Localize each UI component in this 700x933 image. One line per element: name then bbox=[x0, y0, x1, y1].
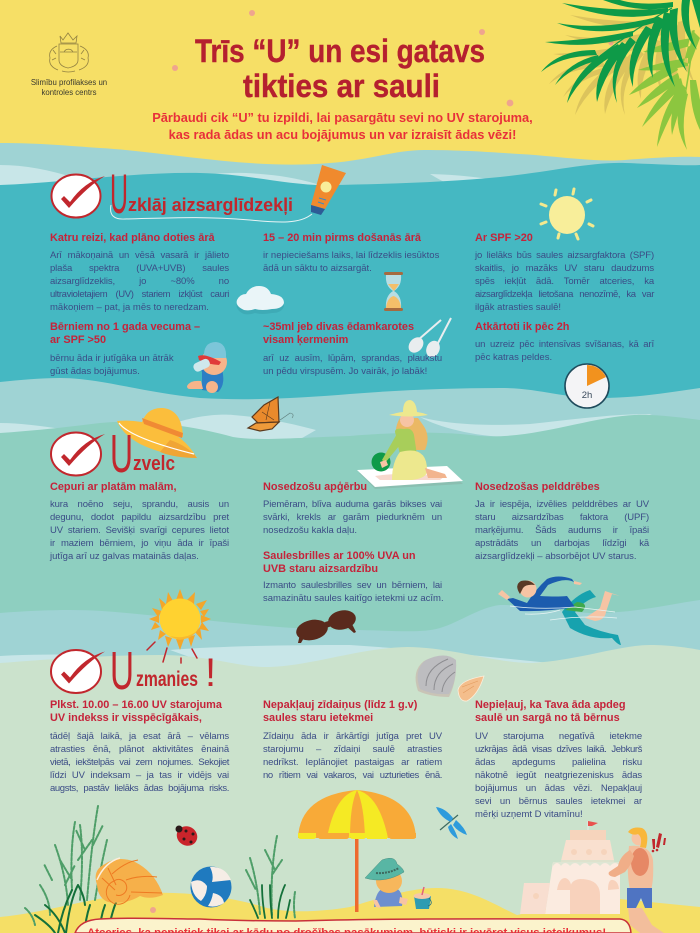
panel: clothing bbox=[263, 481, 442, 536]
background: pale green section bbox=[0, 645, 700, 933]
panel: hat: jutīga arī uz galvas matainās daļas. bbox=[50, 551, 199, 562]
panel: children SPF bbox=[50, 321, 200, 377]
panel: Uzklāj col 1: ultravioletajiem (UV) stariem izkļūst cauri bbox=[50, 289, 229, 300]
panel: 35 ml: ~35ml jeb divas ēdamkarotes bbox=[263, 321, 414, 333]
panel: children SPF: Bērniem no 1 gada vecuma – bbox=[50, 321, 200, 333]
panel: UV index: līdzi UV indeksam – ja tas ir vidējs vai bbox=[50, 770, 229, 781]
heading: Uzmanies: ! bbox=[205, 651, 216, 695]
heading: Uzmanies bbox=[110, 641, 216, 701]
panel: repeat 2h bbox=[475, 321, 654, 363]
panel: 35 ml: visam ķermenim bbox=[263, 334, 348, 346]
panel: sunglasses bbox=[263, 550, 444, 604]
panel: swimwear: marķējumu. Šāds audums ir īpaši bbox=[475, 525, 649, 536]
icon: palm dark frond bbox=[541, 0, 700, 103]
background: pale foam middle bbox=[0, 414, 652, 445]
panel: Uzklāj col 3: ilgāk atrasties saulē! bbox=[475, 302, 561, 313]
icon: palm light frond bbox=[629, 30, 700, 150]
panel: burns: mērķi uzņemt D vitamīnu! bbox=[475, 809, 583, 820]
heading: Uzmanies: U bbox=[110, 641, 134, 701]
logo text: Slimību profilakses un bbox=[31, 78, 107, 87]
panel: infants: no rītiem vai vakaros, vai uzturieties ēnā. bbox=[263, 770, 442, 781]
panel: 35 ml: arī uz ausīm, lūpām, sprandas, plaukstu bbox=[263, 353, 442, 364]
icon: sun with rays bbox=[147, 589, 211, 663]
background: light water middle bbox=[0, 378, 700, 933]
panel: repeat 2h: pēc katras peldes. bbox=[475, 352, 552, 363]
heading: Uzvelc: U bbox=[110, 424, 133, 484]
panel: infants bbox=[263, 699, 442, 781]
icon: spoons bbox=[406, 318, 451, 359]
panel: infants: starojumu – zīdaiņi saulē atrasties bbox=[263, 744, 442, 755]
panel: sunglasses: samazinātu saules kaitīgo ietekmi uz acīm. bbox=[263, 593, 444, 604]
panel: Uzklāj col 2: ir nepieciešams laiks, lai līdzeklis iesūktos bbox=[263, 250, 439, 261]
heading: Uzklāj aizsarglīdzekļi: U bbox=[110, 162, 128, 225]
panel: swimwear: staru aizsardzības faktora (UPF) bbox=[475, 512, 649, 523]
panel: children SPF: bērnu āda ir jutīgāka un ātrāk bbox=[50, 353, 174, 364]
panel: UV index: UV indekss ir visspēcīgākais, bbox=[50, 712, 202, 724]
check mark 3 bbox=[51, 650, 105, 693]
panel: infants: Nepakļauj zīdaiņus (līdz 1 g.v) bbox=[263, 699, 417, 711]
background: seafoam section bbox=[0, 415, 700, 933]
icon: sun hat bbox=[117, 408, 197, 458]
heading: Uzmanies: zmanies bbox=[136, 668, 198, 691]
panel: 35 ml bbox=[263, 321, 442, 377]
panel: Uzklāj col 3: Ar SPF >20 bbox=[475, 232, 533, 244]
panel: swimwear: Ja ir iespēja, izvēlies pelddrēbes ar UV bbox=[475, 499, 649, 510]
panel: burns: UV starojuma negatīvā ietekme bbox=[475, 731, 642, 742]
logo text bbox=[31, 78, 107, 96]
panel: Uzklāj col 1: Katru reizi, kad plāno doties ārā bbox=[50, 232, 215, 244]
heading: Uzklāj aizsarglīdzekļi: zklāj aizsarglīdzekļi bbox=[128, 195, 293, 215]
panel: Uzklāj col 3: aizsarglīdzekļa lietošana nenozīmē, ka var bbox=[475, 289, 654, 300]
panel: Uzklāj col 3: spēs iekļūt ādā. Tomēr atceries, ka bbox=[475, 276, 654, 287]
panel: Uzklāj col 1: Arī mākoņainā un vēsā vasarā ir jālieto bbox=[50, 250, 229, 261]
panel: Uzklāj col 1: plaša spektra (UVA+UVB) saules bbox=[50, 263, 229, 274]
icon: coat of arms logo bbox=[50, 33, 88, 72]
panel: repeat 2h: un uzreiz pēc intensīvas svīšanas, kā arī bbox=[475, 339, 654, 350]
callout box bbox=[75, 918, 631, 933]
panel: UV index: atrasties ēnā, plānot aktivitātes ēnainā bbox=[50, 744, 229, 755]
icon: beach ball bbox=[190, 866, 232, 908]
panel: swimwear: apstrādāts un darbojas līdzīgi kā bbox=[475, 538, 649, 549]
panel: burns: Nepieļauj, ka Tava āda apdeg bbox=[475, 699, 626, 711]
icon: butterfly bbox=[248, 397, 293, 431]
check mark 2 bbox=[51, 432, 105, 476]
icon: sunscreen tube bbox=[311, 165, 346, 215]
icon: cloud bbox=[237, 286, 284, 314]
subtitle: Pārbaudi cik “U” tu izpildi, lai pasargātu sevi no UV starojuma, bbox=[152, 110, 533, 124]
decorative sand dot bbox=[150, 907, 156, 913]
panel: burns: sevi un bērnus saules ietekmei ar bbox=[475, 796, 642, 807]
panel: clothing: nosedzošu kakla daļu. bbox=[263, 525, 357, 536]
panel: UV index: tādēļ šajā laikā, ja esat ārā – vēlams bbox=[50, 731, 229, 742]
check mark 1 bbox=[52, 174, 105, 218]
panel: Uzklāj col 1: aizsarglīdzeklis, jo ~80% no bbox=[50, 276, 229, 287]
icon: dragonfly bbox=[436, 807, 467, 839]
icon: 2h clock bbox=[565, 364, 609, 408]
decorative string to tube bbox=[111, 205, 312, 222]
panel: Uzklāj col 3: jo lielāks būs saules aizsargfaktora (SPF) bbox=[475, 250, 654, 261]
panel: infants: Zīdaiņu āda ir ārkārtīgi jutīga pret UV bbox=[263, 731, 442, 742]
icon: sunglasses bbox=[294, 608, 358, 643]
panel: UV index: vietā, iekštelpās vai zem nojumes. Sekojiet bbox=[50, 757, 229, 768]
panel: hat: ir maziem bērniem, jo viņu āda ir īpaši bbox=[50, 538, 229, 549]
panel: clothing: Nosedzošu apģērbu bbox=[263, 481, 367, 493]
icon: ladybug bbox=[173, 823, 201, 849]
panel: hat: Cepuri ar platām malām, bbox=[50, 481, 176, 493]
title: tikties ar sauli bbox=[243, 68, 440, 104]
panel: Uzklāj col 1: mākoņiem – pat, ja mēs to neredzam. bbox=[50, 302, 209, 313]
panel: clothing: Piemēram, blīva auduma garās bikses vai bbox=[263, 499, 442, 510]
panel: 35 ml: un pēdu virspusēm. Jo vairāk, jo labāk! bbox=[263, 366, 427, 377]
panel: Uzklāj col 3 bbox=[474, 232, 654, 313]
panel: swimwear: aizsarglīdzekļi – absorbējot UV starus. bbox=[475, 551, 637, 562]
panel: sunglasses: UVB staru aizsardzību bbox=[263, 563, 378, 575]
icon: baby with bottle bbox=[187, 342, 227, 393]
panel: burns: saulē un sargā no tā bērnus bbox=[475, 712, 620, 724]
icon: woman on towel bbox=[357, 400, 463, 489]
icon: sunburned boy bbox=[609, 828, 666, 933]
panel: Uzklāj col 2: 15 – 20 min pirms došanās ārā bbox=[263, 232, 421, 244]
panel: hat: UV stariem. Sevišķi svarīgi cepures lietot bbox=[50, 525, 229, 536]
panel: children SPF: gūst ādas bojājumus. bbox=[50, 366, 140, 377]
panel: burns: uzkrājas ādā visas dzīves laikā. Jebkurš bbox=[475, 744, 642, 755]
heading: Uzklāj aizsarglīdzekļi bbox=[110, 162, 293, 225]
panel: hat bbox=[50, 481, 230, 562]
heading: Uzvelc bbox=[110, 424, 175, 484]
icon: palm shadow bbox=[549, 15, 695, 115]
background: pale foam lower bbox=[0, 645, 560, 672]
background: light water lower bbox=[0, 600, 700, 933]
panel: hat: degunu, dodot papildu aizsardzību pret bbox=[50, 512, 229, 523]
subtitle bbox=[152, 110, 533, 142]
panel: burns bbox=[475, 699, 642, 820]
icon: 2h clock: 2h bbox=[582, 390, 592, 401]
panel: swimwear: Nosedzošas pelddrēbes bbox=[475, 481, 600, 493]
panel: Uzklāj col 1 bbox=[50, 232, 229, 313]
panel: UV index: Plkst. 10.00 – 16.00 UV starojuma bbox=[50, 699, 222, 711]
icon: sand castle bbox=[520, 821, 620, 914]
panel: Uzklāj col 2: ādā un sāktu to aizsargāt. bbox=[263, 263, 372, 274]
icon: orange nautilus shell bbox=[96, 858, 163, 904]
panel: infants: saules staru ietekmei bbox=[263, 712, 373, 724]
title bbox=[195, 33, 485, 104]
icon: hourglass bbox=[384, 272, 403, 311]
icon: grass right bbox=[246, 836, 295, 918]
icon: grey seashell bbox=[416, 656, 456, 697]
panel: burns: ādas apdegums palielina risku bbox=[475, 757, 642, 768]
panel: sunglasses: Saulesbrilles ar 100% UVA un bbox=[263, 550, 416, 562]
icon: child in hat bbox=[365, 858, 408, 908]
panel: children SPF: ar SPF >50 bbox=[50, 334, 106, 346]
background: pale foam top bbox=[0, 165, 545, 192]
icon: small orange shell bbox=[458, 676, 484, 701]
icon: sand bucket bbox=[414, 887, 431, 909]
icon: pale sun bbox=[541, 189, 593, 239]
panel: swimwear bbox=[475, 481, 650, 562]
background: sand bbox=[0, 888, 700, 933]
subtitle: kas rada ādas un acu bojājumus un var izraisīt ādas vēzi! bbox=[169, 127, 516, 142]
icon: beach umbrella bbox=[298, 790, 416, 912]
panel: burns: nākotnē iegūt neatgriezeniskus ādas bbox=[475, 770, 642, 781]
panel: UV index bbox=[50, 699, 230, 794]
background: sand dots bbox=[172, 10, 614, 106]
panel: infants: nedrīkst. Ieplānojiet pastaigas ar ratiem bbox=[263, 757, 442, 768]
heading: Uzvelc: zvelc bbox=[133, 453, 175, 475]
icon: swimmer bbox=[498, 576, 621, 645]
panel: burns: bojājumus un ādas vēzi. Nepakļauj bbox=[475, 783, 642, 794]
panel: clothing: svārki, krekls ar garām piedurknēm un bbox=[263, 512, 442, 523]
panel: sunglasses: Izmanto saulesbrilles sev un bērniem, lai bbox=[263, 580, 442, 591]
panel: UV index: augsts, pastāv lielāks ādas bojājuma risks. bbox=[50, 783, 229, 794]
logo text: kontroles centrs bbox=[41, 88, 97, 96]
panel: Uzklāj col 3: skaitlis, jo mazāks UV staru daudzums bbox=[475, 263, 654, 274]
icon: grass left bbox=[25, 806, 118, 933]
panel: hat: kura noēno seju, sprandu, ausis un bbox=[50, 499, 229, 510]
title: Trīs “U” un esi gatavs bbox=[195, 33, 485, 69]
panel: Uzklāj col 2 bbox=[263, 232, 439, 274]
panel: repeat 2h: Atkārtoti ik pēc 2h bbox=[475, 321, 569, 333]
